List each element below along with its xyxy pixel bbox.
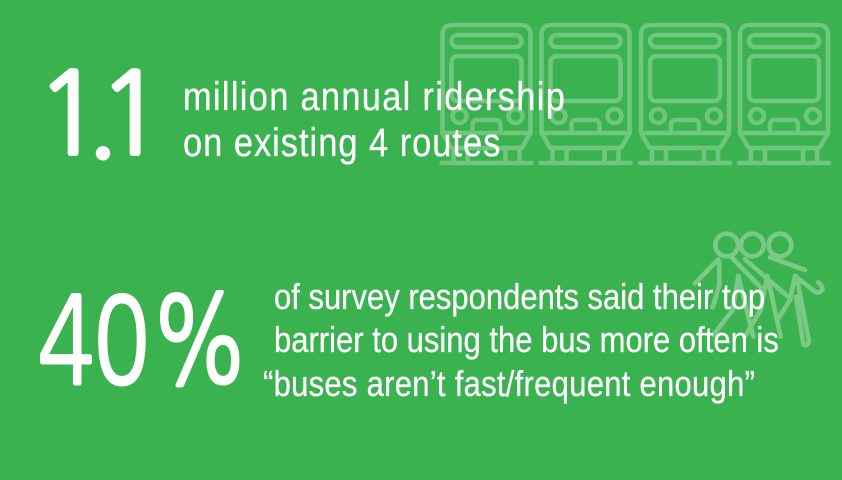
text: ridership description: million annual ridership [183,74,565,119]
stat: 40%: 40% [38,282,250,402]
text: survey description [263,278,779,405]
text: ridership description [183,74,565,165]
icon: three people walking [695,234,822,345]
text: survey description: of survey respondents said their top [274,278,765,318]
icon: row of four buses [442,25,829,163]
text: survey description: “buses aren’t fast/frequent enough” [263,365,755,405]
stat: 1.1: 1.1 [35,57,166,171]
text: survey description: barrier to using the bus more often is [274,321,779,361]
text: ridership description: on existing 4 routes [183,120,500,165]
